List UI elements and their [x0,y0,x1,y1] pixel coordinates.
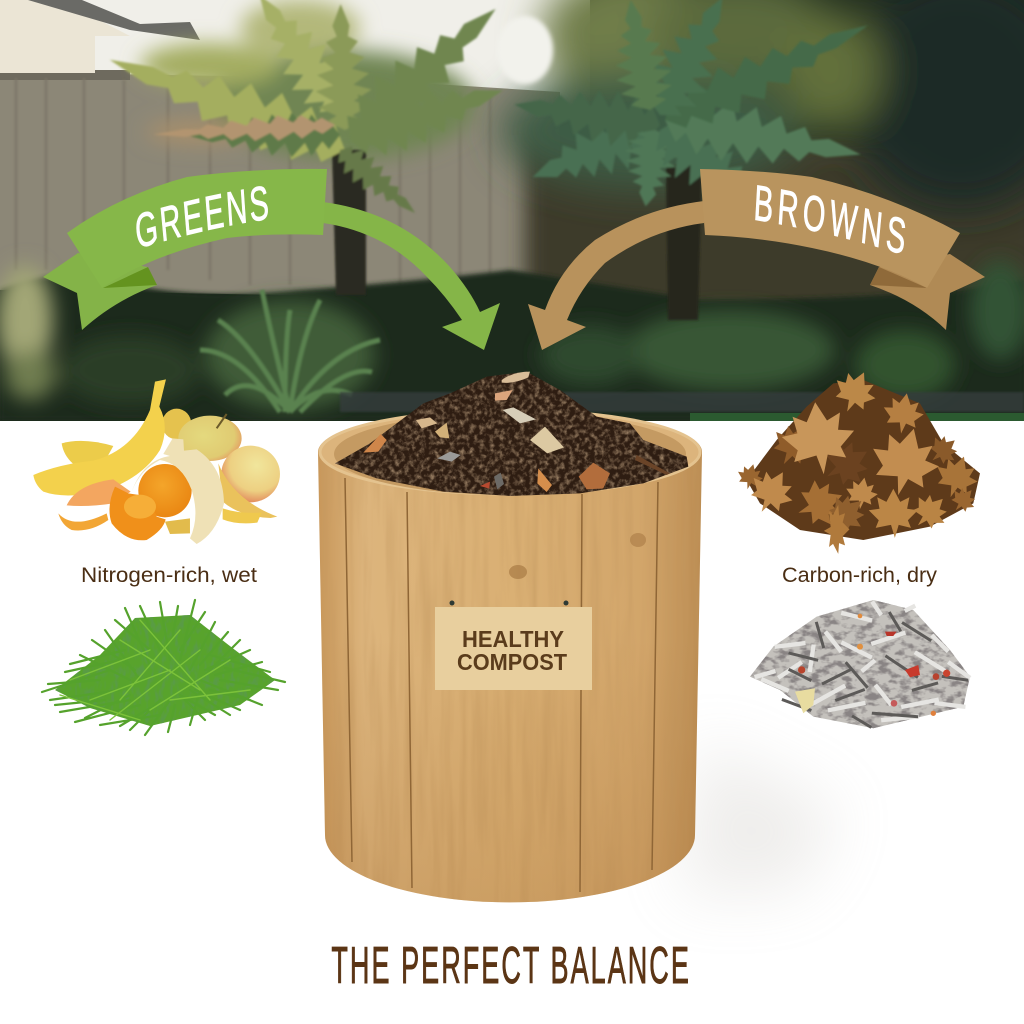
greens banner with arrow [43,168,500,350]
rim [320,410,700,494]
white lower panel [0,421,1024,1024]
title: THE PERFECT BALANCE [331,935,691,994]
label: greens: GREENS [136,186,268,247]
wooden compost bin [318,400,702,910]
green ribbon band [67,169,327,288]
grass blades [42,600,285,735]
label: browns: BROWNS [755,185,906,254]
left crown [140,0,475,160]
leaf shapes [734,363,984,554]
bin shadow [680,740,840,895]
house roof [28,0,200,40]
lower banana peel [223,508,262,523]
brown ribbon tail [870,254,985,330]
green arrow [323,202,500,350]
wooden fence left [0,70,560,300]
bin body [318,409,702,902]
fruit scraps illustration [33,379,280,544]
banana peel [132,438,224,544]
green ribbon tail [43,253,157,330]
stone edging strip [340,392,1024,412]
label: browns [755,185,906,254]
label: nitrogen-rich: Nitrogen-rich, wet [81,563,257,587]
apple stem [217,414,227,428]
shredded newspaper illustration [750,598,972,730]
right tree fern [511,0,879,320]
sign: healthy compost: COMPOST [457,649,567,675]
rear banana [62,441,113,464]
upper right dark foliage [500,0,1024,210]
brown ribbon band [700,169,960,288]
sky gap right [497,16,553,84]
lower shrubs [0,270,1024,420]
brown ribbon fold [870,267,927,288]
brown arrow [528,201,704,350]
compost mound [335,370,691,500]
inner wall [334,413,686,495]
label: carbon-rich: Carbon-rich, dry [782,563,937,587]
cut orange [109,487,166,540]
colored scraps [795,614,950,716]
green ribbon fold [103,267,157,288]
wooden fence right [525,135,1024,330]
left tree fern [99,0,516,295]
label: greens [136,186,268,247]
browns banner with arrow [528,169,985,350]
house [0,0,130,73]
photo background: garden [0,0,1024,421]
paper strips [757,603,968,727]
apple two [221,446,280,502]
sign: healthy compost: HEALTHY [462,626,564,652]
main banana [33,379,166,495]
grass clippings illustration [40,600,290,735]
green lawn strip [690,413,1024,421]
right banana peel [218,463,277,518]
wood grain [320,444,702,902]
compost chips [363,372,670,492]
orange [138,464,192,517]
apple one [178,416,242,461]
bottom peel [165,518,190,534]
cut orange flesh [124,495,156,519]
small pear [162,409,191,439]
sign: healthy compost [435,600,592,690]
sky [60,0,590,110]
spiky grass clump [200,290,380,412]
dry leaves illustration [734,363,984,554]
orange slice [58,513,108,530]
orange peel wedge [67,479,131,506]
